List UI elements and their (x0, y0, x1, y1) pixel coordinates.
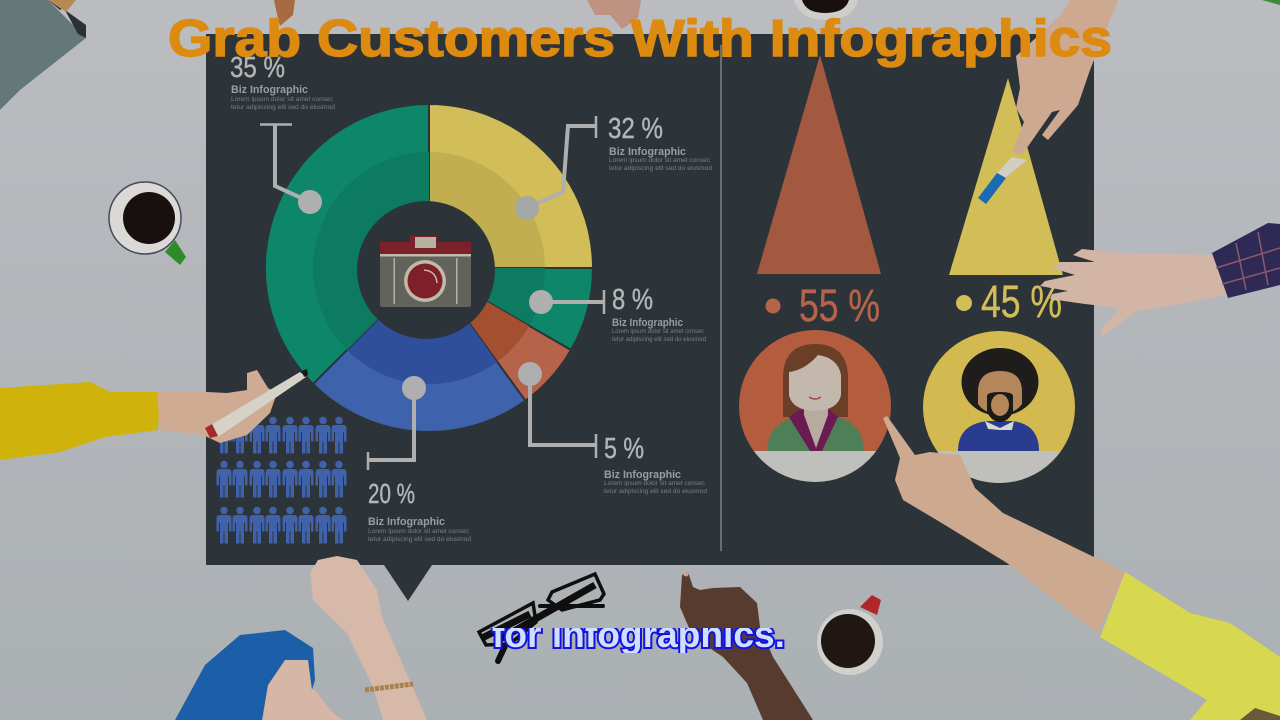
label: 32%: 32 % (608, 113, 663, 145)
divider (720, 45, 722, 551)
top-left sleeve (0, 0, 86, 110)
hand: dark pointing (680, 572, 813, 720)
triangle: orange 55% (757, 55, 881, 274)
label: 8%: tetur adipiscing elit sed do eiusmod (612, 337, 706, 343)
label: 20%: tetur adipiscing elit sed do eiusmod (368, 537, 471, 543)
label: 20% (368, 478, 471, 543)
label: 5%: Biz Infographic (604, 469, 681, 481)
label: 8% (612, 284, 706, 343)
segment: orange 5% (429, 268, 571, 401)
segment: teal 8% (429, 268, 593, 350)
title: Grab Customers With Infographics (168, 10, 1112, 68)
connector: 35% (260, 124, 322, 214)
label: 20%: Biz Infographic (368, 516, 445, 528)
caption: for infographics. (492, 614, 785, 655)
label: 5%: 5 % (604, 433, 644, 465)
icon: coffee cup top (794, 0, 858, 20)
label: 35%: Lorem ipsum dolor sit amet consec (231, 97, 333, 103)
icon: woman avatar (739, 330, 891, 483)
label: 35% (230, 52, 335, 111)
stat: 45%: 45 % (981, 276, 1062, 327)
label: 32%: Lorem ipsum dolor sit amet consec (609, 158, 710, 164)
label: 5%: tetur adipiscing elit sed do eiusmod (604, 489, 707, 495)
top hands (274, 0, 641, 29)
icon: man avatar (923, 331, 1075, 483)
icon: coffee cup bottom (817, 595, 883, 675)
connector: 5% (518, 362, 596, 458)
connector: 20% (368, 376, 426, 470)
label: 5%: Lorem ipsum dolor sit amet consec (604, 481, 705, 487)
hand: bottom right with yellow sleeve (883, 416, 1280, 720)
label: 20%: Lorem ipsum dolor sit amet consec (368, 529, 469, 535)
label: 5% (604, 433, 707, 495)
icon: camera (380, 236, 471, 307)
label: 35%: 35 % (230, 52, 285, 84)
label: 35%: Biz Infographic (231, 84, 308, 96)
connector: 32% (515, 116, 596, 220)
label: 32%: Biz Infographic (609, 146, 686, 158)
label: 20%: 20 % (368, 478, 415, 509)
label: 32%: tetur adipiscing elit sed do eiusmod (609, 166, 712, 172)
hand: left yellow sleeve with marker (0, 369, 308, 460)
label: 8%: 8 % (612, 284, 653, 316)
hand: top right with blue marker (978, 0, 1118, 204)
top-right corner item (1262, 0, 1280, 5)
label: 35%: tetur adipiscing elit sed do eiusmod (231, 105, 335, 111)
stat: 45% (956, 276, 1062, 327)
connector: 8% (529, 290, 604, 314)
dark infographic panel (206, 34, 1094, 601)
people pictogram (216, 417, 346, 544)
triangle: yellow 45% (949, 78, 1063, 275)
stat: 55% (766, 280, 880, 331)
hand: bottom centre fist with bracelet (310, 556, 427, 720)
stat: 55%: 55 % (799, 280, 880, 331)
donut centre (357, 201, 495, 339)
label: 8%: Lorem ipsum dolor sit amet consec (612, 329, 704, 335)
segment: blue 20% (313, 268, 525, 432)
segment: yellow 32% (429, 104, 593, 268)
icon: glasses (479, 574, 604, 661)
arm: bottom left blue sleeve (175, 630, 343, 720)
segment: green 35% (265, 104, 429, 384)
icon: coffee cup left (109, 182, 186, 265)
label: 32% (608, 113, 712, 172)
donut chart (265, 104, 593, 432)
label: 8%: Biz Infographic (612, 317, 683, 329)
hand: right with plaid sleeve (1040, 223, 1280, 336)
